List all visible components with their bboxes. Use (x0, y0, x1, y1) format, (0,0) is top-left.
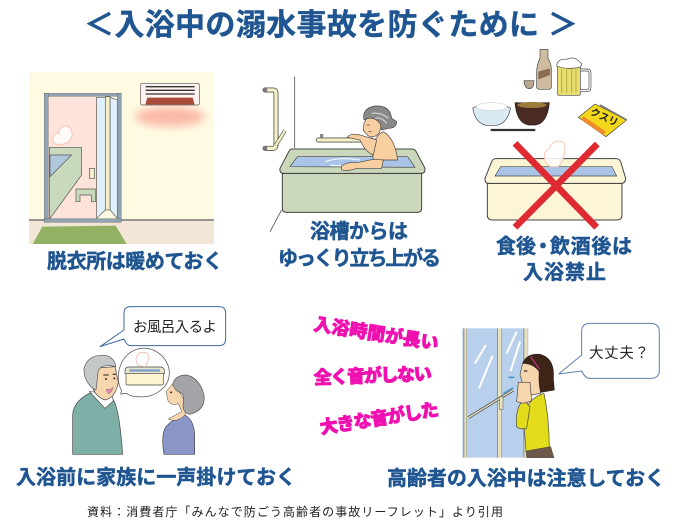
illustration: food, drink, medicine and crossed-out tub: クスリ (588, 106, 620, 129)
caption: ゆっくり立ち上がる (278, 246, 441, 270)
caption: 食後 (496, 236, 536, 258)
source note: 資料：消費者庁「みんなで防ごう高齢者の事故リーフレット」より引用 (87, 504, 503, 519)
illustration: woman calling through bathroom door (462, 323, 659, 458)
caption: 入浴禁止 (523, 261, 606, 284)
panel: warm the changing room (29, 72, 223, 273)
caption (496, 235, 632, 284)
speech text: お風呂入るよ (133, 319, 217, 336)
panel: get up slowly (263, 77, 441, 270)
panel: no bathing after meals or alcohol (473, 49, 632, 284)
illustration: changing room with heater (29, 72, 214, 244)
warning signs in pink text: 大きな音がした (318, 398, 440, 438)
caption: ・ (533, 236, 553, 258)
illustration: elderly couple with speech bubbles (73, 307, 226, 454)
panel: watch over elderly bathers (312, 313, 665, 490)
illustration: woman in bathtub with grab bars (263, 77, 425, 232)
title: ＜入浴中の溺水事故を防ぐために ＞ (84, 9, 578, 42)
caption: 脱衣所は暖めておく (47, 250, 223, 273)
caption: 入浴前に家族に一声掛けておく (16, 466, 296, 489)
panel: tell family before bathing (16, 307, 296, 489)
warning signs in pink text (312, 313, 440, 438)
illustration: food, drink, medicine and crossed-out tub (473, 49, 627, 227)
warning signs in pink text: 全く音がしない (313, 363, 432, 388)
caption: 高齢者の入浴中は注意しておく (387, 467, 665, 490)
caption: 飲酒後は (550, 235, 632, 258)
speech text: 大丈夫？ (589, 345, 649, 362)
caption: 浴槽からは (310, 220, 408, 243)
warning signs in pink text: 入浴時間が長い (312, 313, 440, 354)
caption (278, 220, 441, 270)
